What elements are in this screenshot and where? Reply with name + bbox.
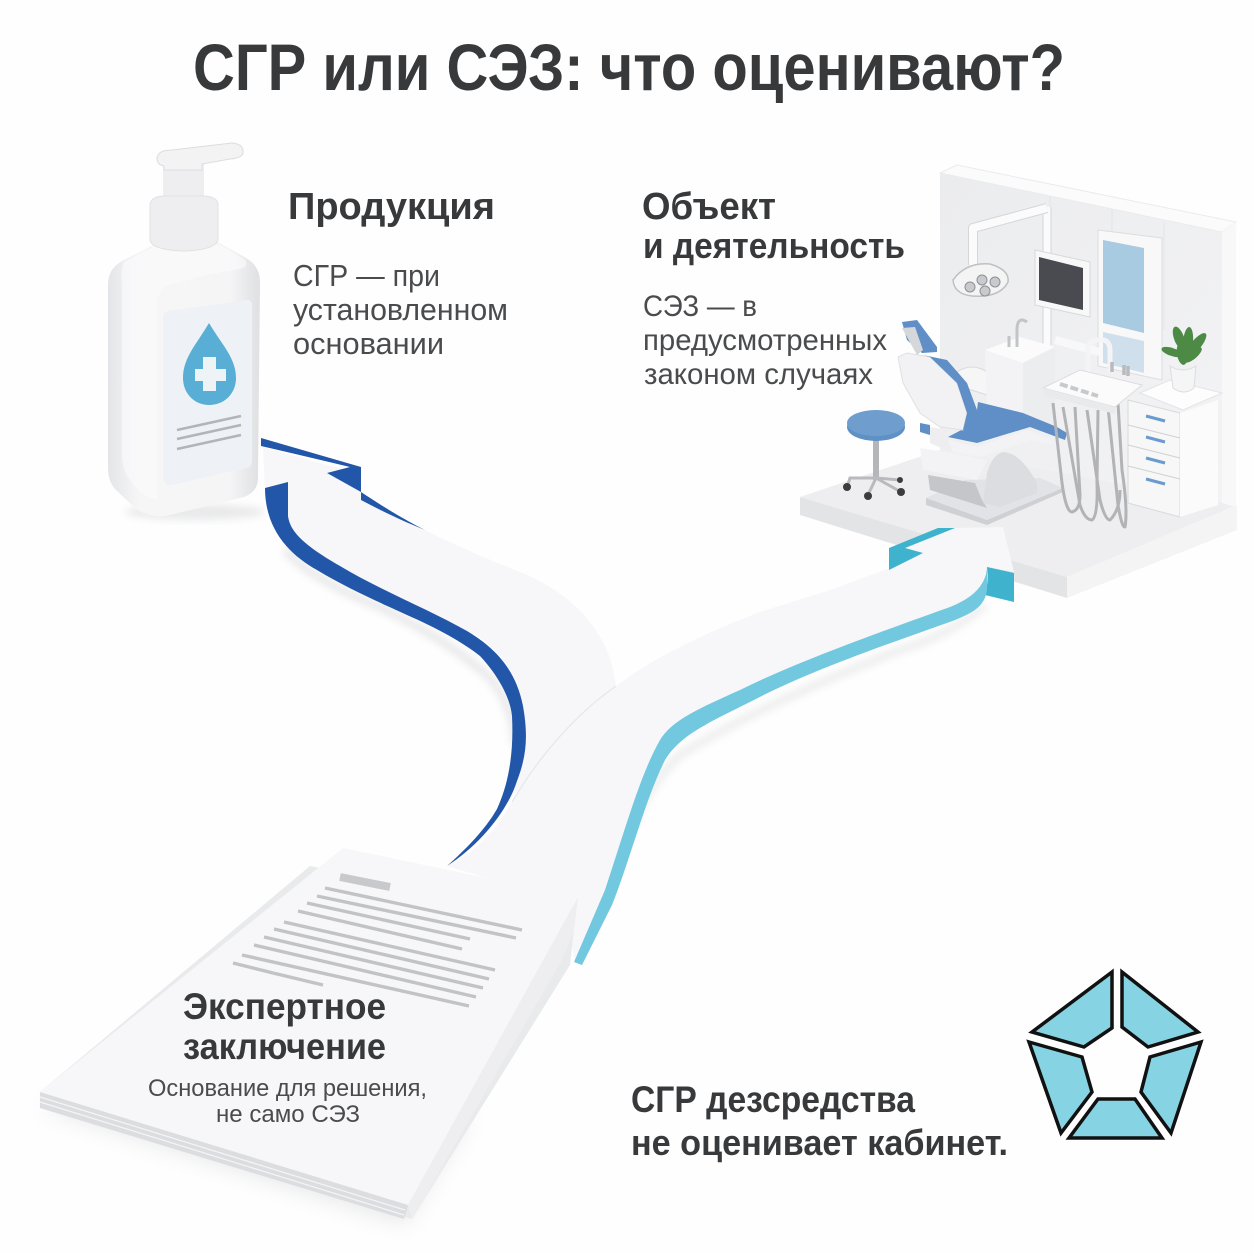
instrument tray and hoses bbox=[1043, 362, 1142, 527]
text: bottom note bbox=[631, 1079, 1008, 1163]
text: expert opinion: заключение bbox=[183, 1026, 386, 1067]
stool bbox=[843, 410, 905, 500]
drawer counter bbox=[1128, 380, 1222, 517]
icon: document stack bbox=[40, 848, 578, 1225]
text: product block bbox=[288, 186, 508, 361]
text: product block: СГР — при bbox=[293, 258, 440, 293]
dental chair bbox=[898, 320, 1067, 525]
text: product block: установленном bbox=[293, 292, 508, 327]
sink unit bbox=[957, 320, 1110, 430]
document text lines bbox=[233, 877, 522, 1006]
text: object block: СЭЗ — в bbox=[643, 290, 757, 323]
title: СГР или СЭЗ: что оценивают? bbox=[193, 30, 1065, 104]
plant bbox=[1160, 325, 1209, 392]
floor platform bbox=[800, 450, 1237, 598]
arrow: cyan ribbon to object bbox=[447, 527, 1014, 965]
text: product block: Продукция bbox=[288, 186, 495, 228]
arrow: blue ribbon to product bbox=[261, 438, 616, 866]
label text lines bbox=[177, 416, 241, 449]
icon: segmented pentagon logo bbox=[1029, 972, 1201, 1138]
icon: blue drop with cross bbox=[183, 323, 236, 405]
back wall bbox=[940, 165, 1236, 507]
monitor bbox=[1035, 250, 1090, 317]
illustration: dental office bbox=[800, 165, 1237, 598]
text: object block bbox=[642, 186, 905, 391]
text: object block: и деятельность bbox=[643, 225, 905, 266]
text: object block: законом случаях bbox=[644, 358, 873, 391]
text: expert opinion bbox=[148, 986, 427, 1128]
text: bottom note: не оценивает кабинет. bbox=[631, 1122, 1008, 1163]
text: product block: основании bbox=[293, 326, 444, 361]
text: expert opinion: Основание для решения, bbox=[148, 1075, 427, 1102]
text: expert opinion: не само СЭЗ bbox=[216, 1101, 360, 1128]
text: expert opinion: Экспертное bbox=[183, 986, 386, 1027]
glass cabinet bbox=[1098, 230, 1162, 380]
lamp arm and lamp bbox=[953, 207, 1047, 345]
icon: pump bottle bbox=[108, 143, 265, 520]
text: bottom note: СГР дезсредства bbox=[631, 1079, 915, 1120]
text: object block: предусмотренных bbox=[643, 324, 887, 357]
text: object block: Объект bbox=[642, 186, 776, 228]
